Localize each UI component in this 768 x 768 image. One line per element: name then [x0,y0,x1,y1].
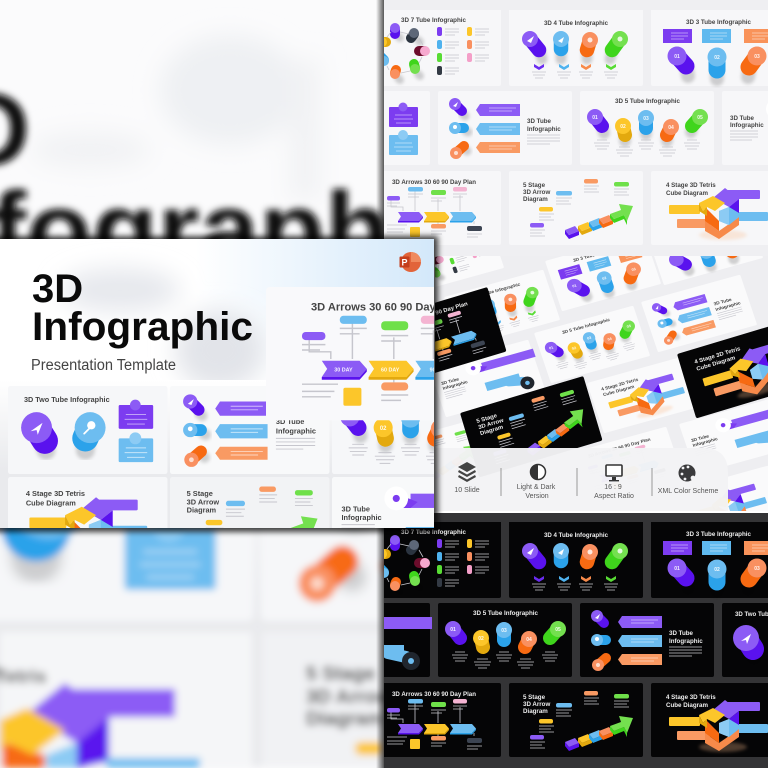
thumb: 3D Tube right: 3D Tube [342,505,370,514]
slide: 3D 5 Tube Infographic: 05 [697,115,703,121]
dark slide: 3D 3 Tube: 02 [714,567,720,573]
title: 3D [32,267,83,311]
dark slide: arrows: 3D Arrows 30 60 90 Day Plan [392,691,476,698]
dark slide: 3D 4 Tube [509,524,643,598]
label: 10 Slide: 10 Slide [454,487,480,494]
thumb: 5 Stage Arrow [170,477,329,565]
thumb: 5 Stage Arrow: 3D Arrow [187,497,219,506]
dark slide: 3D 5 Tube: 04 [526,637,532,643]
iso slide: 4 tube: 3D 4 Tube Infographic [472,282,521,300]
dark slide: tetris: 4 Stage 3D Tetris [666,694,716,701]
dark slide: 3D 5 Tube: 01 [450,627,456,633]
label: Light and Dark Version: Light & Dark [517,484,556,491]
dark slide: tetris: Cube Diagram [666,702,708,709]
inset slide: 3D Arrows 30 60 90 Day Plan: 30 DAY [334,368,353,374]
iso slide: 4 tube [444,270,560,336]
label: Light and Dark Version [517,484,556,498]
dark slide: 3D 3 Tube: 3D 3 Tube Infographic [686,531,752,538]
slide: 5 Stage 3D Arrow Diagram [523,179,633,239]
iso slide: arrows light: 3D Arrows 30 60 90 Day Plan [587,437,651,459]
slide: 3D Tube Infographic with tags [449,98,560,159]
thumb: 3D Tube tags: 3D Tube [276,417,304,426]
slide: 3D 3 Tube Infographic: 02 [714,55,720,61]
dark slide: 3D 5 Tube: 02 [478,636,484,642]
iso slide: tube lower right [680,400,768,466]
slide: 3D 3 Tube Infographic [663,20,768,87]
dark slide: 3D 4 Tube: 3D 4 Tube Infographic [544,532,609,539]
slide: 3D 4 Tube Infographic: 3D 4 Tube Infographic [544,20,609,27]
slide: 3D 3 Tube Infographic: 3D 3 Tube Infographic [686,19,752,26]
subtitle: Presentation Template [31,357,176,374]
iso slide: 5 tube: 01 [549,346,554,350]
title: Infographic [32,305,253,349]
thumb: 3D Tube tags [170,386,329,474]
icon: PowerPoint logo: P [401,258,408,268]
thumb: 3D 5 Tube: 02 [380,426,387,432]
slide: 3D Two Tube cards [389,102,418,155]
iso slide: arrows dark [435,287,506,373]
iso slide: tetris dark [677,317,768,418]
blurred background: enlarged cover slide: 3D Arrow [306,686,393,708]
iso slide: 3 tube top: 02 [602,276,607,281]
iso slide: 3 tube top: 3D 3 Tube Infographic [572,245,622,263]
features bar [435,448,728,513]
slide: 3D 5 Tube Infographic: 01 [592,115,598,121]
dark slide: 5 stage: 3D Arrow [523,701,550,708]
blurred background: enlarged cover slide [0,0,384,768]
dark slide: tube tags: Infographic [669,638,703,645]
iso slide: tube tags: Infographic [715,300,742,312]
iso slide: 5 stage dark [460,376,602,448]
iso slide: 3 tube right [654,256,762,285]
icon: palette [678,464,696,482]
dark slide: tube right [296,603,432,677]
dark slide: 3D 3 Tube: 03 [754,566,760,572]
icon: PowerPoint logo [400,252,421,272]
title [32,267,253,349]
iso slide: 4 stage tetris light [588,358,693,433]
iso slide: arrows light [590,427,673,448]
panel: light slide thumbnails [384,0,768,256]
dark slide: 5 stage [509,683,643,757]
iso slide: 5 stage dark: 3D Arrow [478,418,505,431]
slide: 5 Stage 3D Arrow Diagram: 5 Stage [523,182,546,189]
dark slide: 3D 3 Tube [651,524,768,598]
inset slide: 3D Arrows 30 60 90 Day Plan: 90 DAY [430,368,448,374]
thumb: 3D Tube right: Infographic [342,513,382,522]
dark slide: 3D 7 Tube: 3D 7 Tube Infographic [401,529,467,536]
slide: 5 Stage 3D Arrow Diagram: Diagram [523,196,548,203]
thumb: 3D Two Tube Infographic [8,386,167,474]
slide: 3D 4 Tube Infographic [522,20,628,78]
dark slide: 3D 5 Tube: 05 [555,627,561,633]
iso slide: tube tags [641,275,757,352]
dark slide: 3D 5 Tube [438,603,572,677]
iso slide: 4 stage tetris light: 4 Stage 3D Tetris [601,377,639,392]
thumb: 4 Stage Tetris [8,477,167,565]
dark slide: two tube [722,603,768,677]
panel: dark slide thumbnails [384,513,768,768]
iso slide: 3 tube top: 03 [631,267,636,272]
slide: 3D 5 Tube Infographic: 02 [620,124,626,130]
slide: 4 Stage 3D Tetris Cube Diagram: 4 Stage 3D Tetris [666,182,716,189]
iso slide: tube left: Infographic [442,379,469,391]
blurred background: enlarged cover slide: Diagram [306,708,384,730]
iso slide: 3 tube top: 01 [572,284,577,288]
slide: 3D Arrows 30 60 90 Day Plan: 3D Arrows 30 60 90 Day Plan [392,179,476,186]
inset slide: 3D Arrows 30 60 90 Day Plan [266,287,507,420]
slide: 4 Stage 3D Tetris Cube Diagram [666,182,768,242]
iso slide: tube lower right: 3D Tube [690,433,710,443]
dark slide: 5 stage: 5 Stage [523,694,546,701]
iso slide: tube lower right: Infographic [692,436,719,448]
iso slide: 5 stage dark: 5 Stage [476,413,499,425]
iso slide: 4 stage tetris light: Cube Diagram [602,384,635,397]
blurred background: enlarged cover slide: 3D Arrow [306,686,393,708]
inset slide: 3D Arrows 30 60 90 Day Plan: 60 DAY [381,368,400,374]
dark slide: tube tags: 3D Tube [669,630,694,637]
iso slide: 5 stage dark: Diagram [480,425,504,437]
dark slide: 3D 5 Tube: 03 [501,628,507,634]
thumb: 4 Stage Tetris: Cube Diagram [26,499,76,508]
iso slide: 5 tube: 03 [587,336,592,341]
iso slide: tetris dark: 4 Stage 3D Tetris [694,346,741,366]
icon: layers [458,462,476,482]
iso slide: tetris lower right [728,466,768,511]
main card shadow [0,236,438,532]
slide: 3D Arrows 30 60 90 Day Plan [387,180,482,238]
thumb: 3D Two Tube Infographic: 3D Two Tube Infographic [24,395,110,404]
iso slide: tetris dark: Cube Diagram [696,355,736,373]
slide: 3D 3 Tube Infographic: 03 [754,54,760,60]
icon: monitor [606,465,622,481]
dark slide: arrows [367,683,501,757]
label: aspect ratio [594,484,634,500]
slide: 3D Tube Infographic right: Infographic [730,122,764,129]
iso slide: tube left [439,340,544,417]
iso slide: 5 stage light left [435,422,470,448]
iso slide: 5 tube: 02 [571,346,577,351]
dark slide: 3D 5 Tube: 3D 5 Tube Infographic [473,610,539,617]
dark slide: 3D 3 Tube: 01 [674,566,680,572]
iso slide: arrows dark: 3D Arrows 30 60 90 Day Plan [389,301,469,330]
label: Light and Dark Version: Version [525,493,549,500]
dark slide: 5 stage: Diagram [523,708,548,715]
inset slide: 3D Arrows 30 60 90 Day Plan: 3D Arrows 30 60 90 Day Plan [311,301,462,313]
iso slide: 5 tube: 3D 5 Tube Infographic [561,317,611,335]
iso slide: 5 tube: 05 [626,324,632,329]
panel: isometric slide collage [435,256,768,511]
blurred background: enlarged cover slide: 5 Stage [306,663,376,685]
slide: 3D Tube Infographic with tags: Infographic [527,126,561,133]
slide: 3D 5 Tube Infographic [587,98,708,156]
thumb: 4 Stage Tetris: 4 Stage 3D Tetris [26,489,85,498]
slide: 4 Stage 3D Tetris Cube Diagram: Cube Diagram [666,190,708,197]
iso slide: tube left: 3D Tube [440,376,460,386]
dark slide: tetris [651,683,768,757]
thumb: 5 Stage Arrow: 5 Stage [187,489,213,498]
thumb: 3D Tube tags: Infographic [276,427,316,436]
label: XML Color Scheme: XML Color Scheme [658,488,718,495]
slide: 3D 3 Tube Infographic: 01 [674,54,680,60]
thumb: 3D Tube right [332,477,494,565]
thumb: 3D 5 Tube [332,386,491,474]
slide: 5 Stage 3D Arrow Diagram: 3D Arrow [523,189,550,196]
icon: contrast circle [530,464,546,480]
iso slide: 5 tube: 04 [607,337,613,342]
dark slide: tube tags [580,603,714,677]
slide: 3D 5 Tube Infographic: 3D 5 Tube Infographic [615,98,681,105]
thumb: 5 Stage Arrow: Diagram [187,506,217,515]
slide: 3D Tube Infographic right: 3D Tube [730,115,755,122]
panel: main cover card [0,239,507,565]
iso slide: tube tags: 3D Tube [713,297,733,306]
iso slide: 5 tube [534,306,650,383]
label: aspect ratio: 16 : 9 [604,484,622,491]
iso slide: 7 tube [435,256,504,286]
blurred background: enlarged cover slide: Diagram [306,707,384,729]
slide: 3D 7 Tube Infographic: 3D 7 Tube Infographic [401,17,467,24]
slide: 3D Tube Infographic with tags: 3D Tube [527,118,552,125]
dark slide: 3D 7 Tube [384,526,501,598]
slide: 3D 7 Tube Infographic [384,18,489,84]
blurred background: enlarged cover slide: 5 Stage [306,662,375,684]
slide: 3D 5 Tube Infographic: 03 [643,116,649,122]
iso slide: 3 tube top [546,256,660,311]
slide: 3D 5 Tube Infographic: 04 [668,125,674,131]
slide: 3D Tube Infographic right [730,103,768,140]
label: aspect ratio: Aspect Ratio [594,493,634,500]
